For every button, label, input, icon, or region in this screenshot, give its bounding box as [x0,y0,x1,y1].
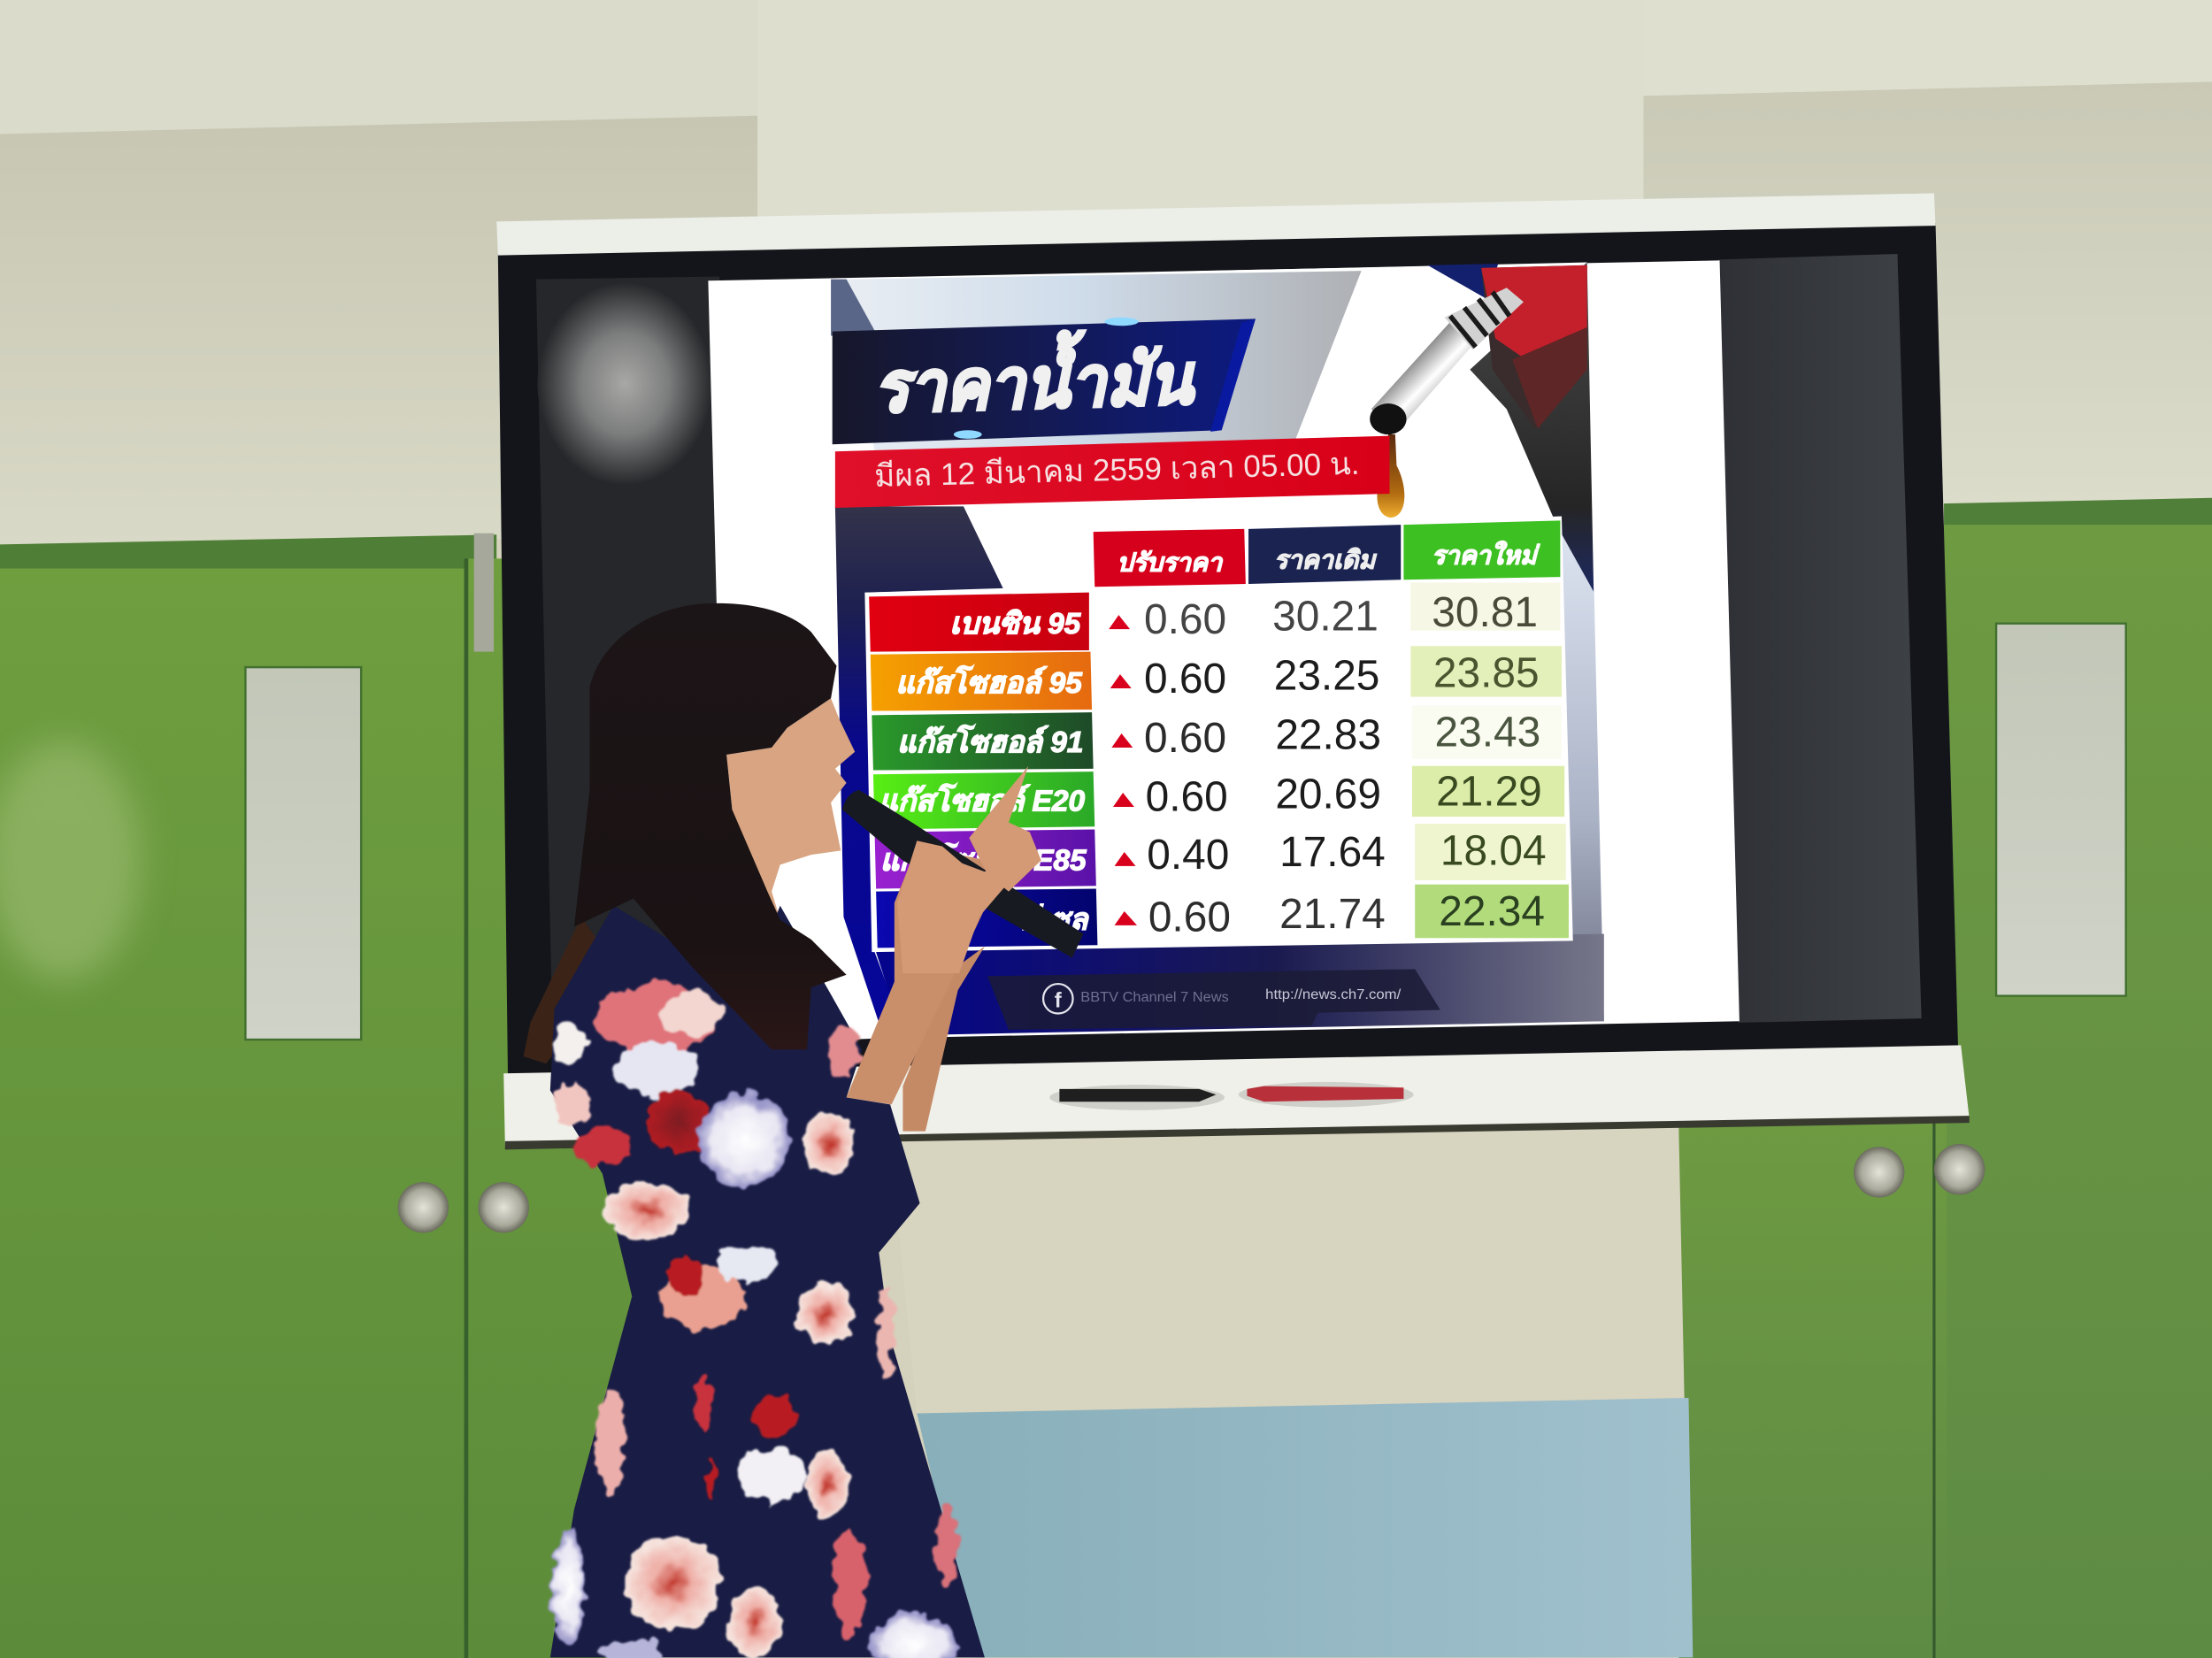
door window left [245,667,361,1040]
interactive display [496,193,1958,1075]
price numbers [1144,589,1547,940]
slide footer: http://news.ch7.com/ [1265,987,1402,1002]
column headers: ราคาใหม่ [1432,541,1540,571]
fuel nozzle icon [1370,265,1587,518]
left screen glare [536,276,750,1055]
red up arrows [1109,615,1137,925]
marker tray [503,1045,1970,1149]
right green doors [1678,498,2212,1658]
right screen area [1718,254,1922,1023]
left green doors [0,533,632,1658]
dress flowers [551,983,958,1658]
hair back [524,917,621,1063]
date text: มีผล 12 มีนาคม 2559 เวลา 05.00 น. [874,447,1360,494]
title text: ราคาน้ำมัน [872,326,1196,427]
price numbers: 22.83 [1275,712,1381,759]
price numbers: 0.60 [1144,596,1226,643]
red marker [1247,1086,1403,1101]
black marker [1059,1089,1216,1101]
column headers: ราคาเดิม [1274,547,1377,575]
column headers [1094,520,1560,587]
dress [550,906,985,1658]
price numbers: 18.04 [1440,827,1547,874]
door knobs [398,1144,1985,1232]
door window right [1996,624,2126,996]
fuel row labels: แก๊สโซฮอล์ 95 [895,664,1082,700]
fuel row labels: แก๊สโซฮอล์ E85 [880,842,1087,878]
price numbers: 30.21 [1272,594,1379,641]
slide footer [987,969,1440,1030]
price numbers: 23.25 [1274,653,1379,700]
date bar [835,436,1389,508]
hair [574,603,847,1049]
price numbers: 22.34 [1439,888,1545,935]
price numbers: 21.74 [1279,891,1386,938]
fuel row labels [869,593,1097,948]
price numbers: 0.40 [1147,832,1229,879]
presenter [524,603,1083,1658]
price numbers: 0.60 [1146,774,1228,821]
title banner [833,318,1256,444]
slide footer: BBTV Channel 7 News [1080,990,1229,1005]
microphone [842,790,1083,958]
new price cell shading [1410,582,1569,938]
price numbers: 0.60 [1148,894,1231,940]
near arm [847,847,987,1104]
price table [864,517,1573,952]
price numbers: 23.85 [1433,649,1540,696]
price numbers: 21.29 [1436,768,1542,815]
icon: facebook [1043,984,1073,1014]
neck and face [726,698,855,920]
column headers: ปรับราคา [1117,549,1224,578]
fuel row labels: เบนซิน 95 [950,608,1081,641]
price numbers: 23.43 [1434,709,1540,756]
fuel row labels: แก๊สโซฮอล์ E20 [879,783,1085,818]
price numbers: 0.60 [1144,656,1226,702]
hand and fingers [897,766,1041,973]
price numbers: 20.69 [1275,771,1381,818]
fuel row labels: แก๊สโซฮอล์ 91 [897,724,1083,759]
oil drop [1377,434,1404,518]
price numbers: 17.64 [1279,829,1386,876]
lower wall under screen [888,1128,1693,1657]
icon: facebook: f [1055,988,1062,1012]
far arm [902,947,985,1132]
slide background [831,263,1604,1035]
price numbers: 30.81 [1432,589,1538,636]
price numbers: 0.60 [1144,715,1226,762]
fuel row labels: ดีเซล [1020,904,1090,937]
slide [708,260,1740,1044]
